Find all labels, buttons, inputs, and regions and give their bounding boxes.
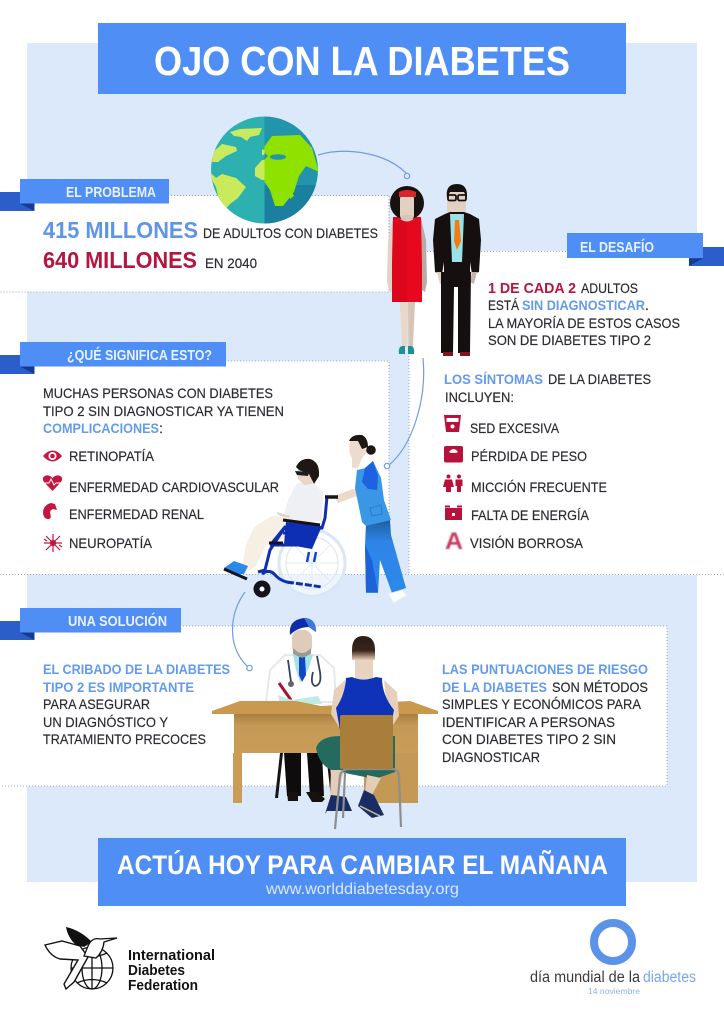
foot [224, 561, 248, 574]
icon: neuron [44, 534, 62, 552]
text block: complicaciones: TIPO 2 SIN DIAGNOSTICAR YA TIENEN [43, 403, 284, 419]
statistics: 415 millones: DE ADULTOS CON DIABETES [203, 225, 378, 241]
text block: los síntomas: LOS SÍNTOMAS [444, 371, 543, 387]
shins [330, 770, 344, 797]
text block: el cribado: EL CRIBADO DE LA DIABETES [43, 661, 230, 677]
text block: los síntomas: INCLUYEN: [445, 389, 514, 405]
text block: el desafío: ESTÁ [488, 297, 520, 313]
complication: enfermedad cardiovascular: ENFERMEDAD CARDIOVASCULAR [69, 479, 279, 495]
head [298, 466, 313, 485]
complication: enfermedad renal: ENFERMEDAD RENAL [69, 506, 204, 522]
connector: globe to people [318, 151, 410, 179]
call to action: ACTÚA HOY PARA CAMBIAR EL MAÑANA [117, 849, 608, 880]
doctor [266, 618, 336, 802]
text block: puntuaciones de riesgo: DIAGNOSTICAR [442, 749, 540, 765]
symptom: falta de energía [445, 506, 590, 523]
symptom: visión borrosa [445, 528, 584, 555]
statistics: 415 millones: 415 MILLONES [43, 217, 198, 243]
complication: retinopatía: RETINOPATÍA [69, 448, 155, 464]
text block: el cribado [43, 661, 230, 747]
text block: el cribado: TIPO 2 ES IMPORTANTE [43, 679, 194, 695]
ribbon: una solución [0, 608, 181, 640]
icon: glass [444, 415, 461, 432]
panel: el desafío [409, 251, 724, 575]
panel: qué significa esto [0, 361, 389, 574]
legs [233, 516, 318, 573]
ribbon label: EL PROBLEMA [66, 185, 156, 201]
symptom: sed excesiva [444, 415, 560, 436]
symptom: falta de energía: FALTA DE ENERGÍA [471, 507, 590, 523]
logo: día mundial de la diabetes [530, 923, 696, 996]
illustration: nurse pushing wheelchair [334, 435, 407, 603]
big wheel [279, 530, 345, 596]
text block: el desafío: SON DE DIABETES TIPO 2 [488, 332, 651, 348]
title banner [98, 23, 626, 94]
icon: heart with pulse [43, 475, 62, 491]
ribbon label: ¿QUÉ SIGNIFICA ESTO? [67, 347, 212, 364]
icon: blue circle [594, 923, 632, 961]
footer banner [98, 838, 626, 906]
complication: enfermedad cardiovascular [43, 475, 279, 495]
panel: una solución [0, 626, 667, 786]
chair back [340, 715, 393, 769]
illustration: patient in wheelchair [224, 459, 345, 598]
complication: enfermedad renal [43, 503, 204, 522]
statistics: 640 millones: EN 2040 [205, 255, 257, 271]
logo: International Diabetes Federation: Federation [128, 977, 198, 994]
text block: puntuaciones de riesgo: DE LA DIABETES [442, 679, 547, 695]
shoes [325, 795, 352, 814]
logo: International Diabetes Federation: Diabetes [128, 962, 185, 979]
logo: International Diabetes Federation: International [128, 947, 215, 964]
arm [334, 487, 370, 503]
ribbon label: UNA SOLUCIÓN [68, 612, 167, 630]
illustration: woman in red dress [387, 186, 427, 354]
text block: complicaciones: : [159, 420, 163, 436]
patient [316, 636, 401, 829]
background panel [27, 43, 697, 882]
text block: complicaciones [43, 385, 284, 436]
statistics: 640 millones: 640 MILLONES [43, 247, 197, 273]
logo: día mundial de la diabetes: día mundial de la [530, 969, 640, 986]
icon: kidney [43, 503, 57, 519]
logo: día mundial de la diabetes: diabetes [643, 969, 696, 986]
ribbon: el desafío [567, 233, 724, 266]
website: www.worlddiabetesday.org [265, 881, 459, 898]
illustration: man in suit [433, 184, 481, 356]
text block: puntuaciones de riesgo: CON DIABETES TIPO 2 SIN [442, 731, 616, 747]
icon: eye [43, 450, 62, 462]
icon: battery [445, 506, 462, 520]
ribbon label: EL DESAFÍO [580, 239, 654, 256]
head [349, 439, 367, 468]
complication: neuropatía: NEUROPATÍA [69, 535, 153, 551]
text block: puntuaciones de riesgo: SIMPLES Y ECONÓMICOS PARA [442, 696, 642, 712]
small wheel [254, 580, 270, 598]
text block: el cribado: PARA ASEGURAR [43, 696, 150, 712]
tunic [355, 461, 391, 526]
icon: globe [211, 116, 318, 224]
icon: hummingbird and globe [45, 927, 117, 989]
text block: el desafío: . [645, 297, 649, 313]
divider line: lower edge of the middle panels [0, 574, 724, 576]
text block: puntuaciones de riesgo [442, 661, 648, 765]
connector: wheelchair to doctor [232, 592, 252, 671]
text block: el desafío: ADULTOS [581, 280, 638, 296]
symptom: micción frecuente [443, 474, 607, 495]
trousers [365, 520, 406, 593]
icon: blurred letter: A [445, 528, 463, 555]
ribbon: qué significa esto [0, 342, 226, 374]
desk top [212, 701, 438, 714]
illustration: doctor and patient at desk [212, 618, 438, 829]
panel: el problema [0, 196, 389, 292]
text block: el desafío: 1 DE CADA 2 [488, 280, 576, 297]
symptom: micción frecuente: MICCIÓN FRECUENTE [471, 479, 607, 495]
ribbon: el problema [0, 179, 169, 211]
logo: día mundial de la diabetes: 14 noviembre [588, 987, 641, 996]
torso [284, 482, 323, 521]
title: OJO CON LA DIABETES [154, 38, 570, 84]
shorts [316, 736, 395, 779]
complication: neuropatía [44, 534, 153, 552]
text block: complicaciones: MUCHAS PERSONAS CON DIABETES [43, 385, 273, 401]
text block: puntuaciones de riesgo: IDENTIFICAR A PERSONAS [442, 714, 615, 730]
text block: complicaciones: COMPLICACIONES [43, 420, 159, 436]
text block: puntuaciones de riesgo: LAS PUNTUACIONES DE RIESGO [442, 661, 648, 677]
chair legs [335, 769, 401, 829]
text block: los síntomas [444, 371, 651, 405]
text block: el desafío [488, 280, 680, 348]
symptom: pérdida de peso [444, 446, 587, 464]
text block: los síntomas: DE LA DIABETES [548, 371, 651, 387]
text block: el desafío: SIN DIAGNOSTICAR [522, 297, 645, 313]
logo: International Diabetes Federation [45, 927, 215, 994]
text block: el cribado: UN DIAGNÓSTICO Y [43, 714, 169, 730]
symptom: pérdida de peso: PÉRDIDA DE PESO [471, 448, 587, 464]
desk body [234, 714, 418, 753]
frame [258, 497, 327, 587]
icon: toilet people [443, 474, 462, 492]
icon: scale [444, 446, 463, 462]
text block: el desafío: LA MAYORÍA DE ESTOS CASOS [488, 315, 680, 331]
text block: el cribado: TRATAMIENTO PRECOCES [43, 731, 206, 747]
symptom: sed excesiva: SED EXCESIVA [470, 420, 560, 436]
symptom: visión borrosa: VISIÓN BORROSA [470, 535, 584, 551]
text block: puntuaciones de riesgo: SON MÉTODOS [552, 679, 648, 695]
statistics: 415 millones [43, 217, 378, 243]
shoes [388, 590, 407, 603]
connector: people to wheelchair [384, 358, 424, 469]
